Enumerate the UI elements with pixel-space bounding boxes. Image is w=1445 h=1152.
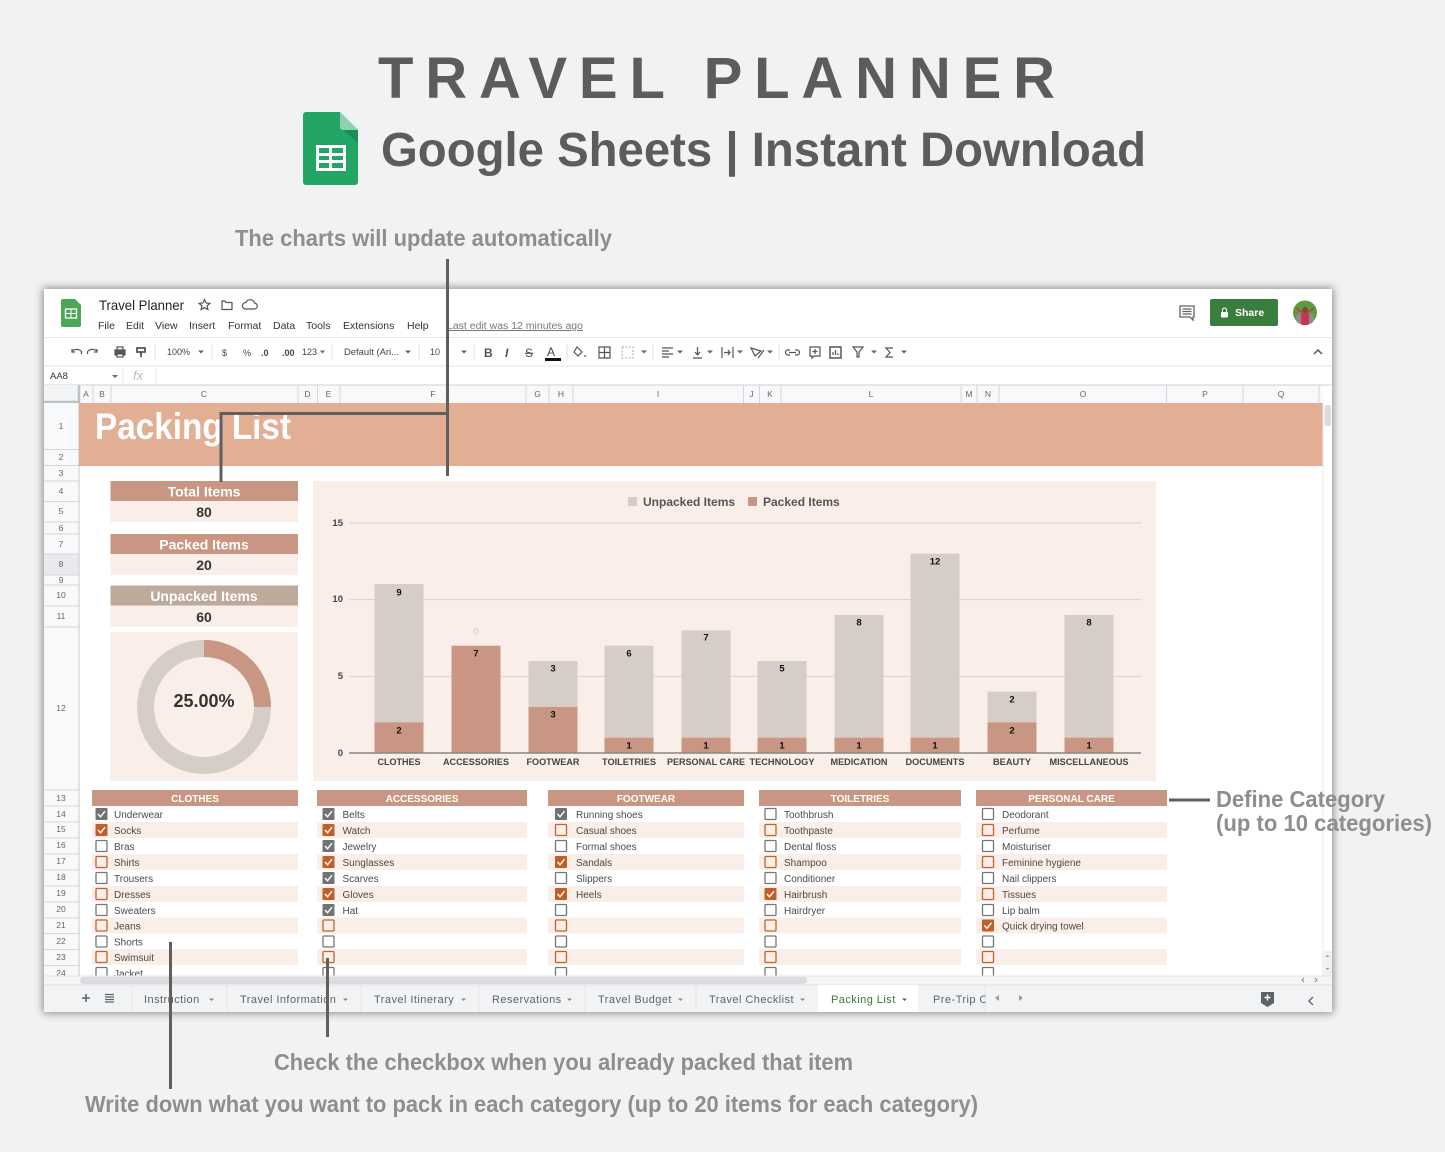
menu bar: Tools bbox=[306, 320, 331, 332]
category labels: TOILETRIES bbox=[602, 757, 656, 767]
panel: column headers: Q bbox=[1278, 389, 1285, 399]
list: accessories: Scarves bbox=[342, 874, 379, 885]
panel: sheet tabs bbox=[44, 985, 1332, 1012]
value labels: 1 bbox=[626, 740, 632, 752]
list: personal care: Moisturiser bbox=[1002, 842, 1052, 853]
chart legend bbox=[628, 495, 840, 509]
donut chart: 25.00% bbox=[173, 691, 235, 711]
toolbar text: 123 bbox=[302, 347, 317, 357]
tab labels: Packing List bbox=[831, 994, 896, 1006]
list: accessories bbox=[317, 790, 527, 978]
panel: column headers: E bbox=[326, 389, 332, 399]
share button bbox=[1210, 299, 1278, 326]
stat: total items bbox=[110, 481, 298, 522]
panel: column headers: C bbox=[201, 389, 207, 399]
list: clothes: Sweaters bbox=[114, 906, 156, 917]
value labels: 6 bbox=[626, 648, 632, 660]
value labels: 3 bbox=[550, 710, 556, 720]
bars bbox=[374, 554, 1114, 753]
value labels: 1 bbox=[932, 740, 938, 752]
panel: row headers: 2 bbox=[59, 452, 64, 462]
list: clothes: Trousers bbox=[114, 874, 153, 885]
chart axis: 15 bbox=[332, 518, 344, 529]
list: accessories: Belts bbox=[342, 810, 365, 821]
panel: row headers: 9 bbox=[59, 575, 64, 585]
stat: packed items bbox=[110, 534, 298, 575]
panel: column headers: J bbox=[749, 389, 754, 399]
list: clothes: Swimsuit bbox=[114, 953, 154, 964]
list: accessories: Watch bbox=[342, 826, 370, 837]
list: clothes: Jacket bbox=[114, 969, 143, 980]
panel: row headers: 23 bbox=[56, 952, 66, 962]
panel: row headers: 4 bbox=[59, 486, 64, 496]
menu bar: View bbox=[155, 320, 178, 332]
list: clothes: Dresses bbox=[114, 890, 151, 901]
tab labels: Pre-Trip C bbox=[933, 994, 988, 1006]
list: clothes: Underwear bbox=[114, 810, 164, 821]
banner: Packing List: Packing List bbox=[95, 406, 291, 447]
tab labels: Reservations bbox=[492, 994, 562, 1006]
panel: column headers: O bbox=[1080, 389, 1087, 399]
value labels: 8 bbox=[856, 618, 862, 628]
panel: column headers: M bbox=[965, 389, 973, 399]
list: toiletries bbox=[759, 790, 961, 978]
list: personal care bbox=[976, 790, 1167, 978]
value labels: 12 bbox=[930, 556, 940, 568]
callout: write items: Write down what you want to pack in each category (up to 20 items for each category) bbox=[85, 1091, 978, 1117]
panel: row headers: 13 bbox=[56, 793, 66, 803]
list: accessories: Hat bbox=[342, 906, 358, 917]
category labels: CLOTHES bbox=[378, 757, 420, 767]
list: footwear bbox=[548, 790, 744, 978]
list: clothes: Socks bbox=[114, 826, 141, 837]
list: clothes: Bras bbox=[114, 842, 135, 853]
callout: checkbox: Check the checkbox when you already packed that item bbox=[274, 1049, 853, 1075]
tab labels: Instruction bbox=[144, 994, 200, 1006]
chart legend: Unpacked Items bbox=[643, 495, 735, 509]
toolbar text: .0 bbox=[261, 348, 269, 358]
panel: row headers: 16 bbox=[56, 840, 66, 850]
list: toiletries: Hairbrush bbox=[784, 890, 827, 901]
value labels: 7 bbox=[473, 648, 479, 660]
value labels: 8 bbox=[1086, 618, 1092, 628]
toolbar text: 10 bbox=[430, 347, 440, 357]
menu bar: Edit bbox=[126, 320, 144, 332]
panel: row headers: 14 bbox=[56, 809, 66, 819]
panel: row headers: 3 bbox=[59, 468, 64, 478]
panel: row headers: 11 bbox=[57, 611, 66, 621]
list: accessories: Jewelry bbox=[342, 842, 376, 853]
list: personal care: Feminine hygiene bbox=[1002, 858, 1081, 869]
stat: total items: Total Items bbox=[168, 484, 241, 500]
menu bar: Insert bbox=[189, 320, 215, 332]
list: accessories: Sunglasses bbox=[342, 858, 394, 869]
panel: row headers: 1 bbox=[59, 421, 64, 431]
list: clothes: CLOTHES bbox=[171, 794, 219, 805]
list: footwear: Slippers bbox=[576, 874, 612, 885]
panel: row headers: 12 bbox=[56, 703, 66, 713]
toolbar text bbox=[167, 345, 907, 361]
list: accessories: ACCESSORIES bbox=[386, 794, 459, 805]
panel: row headers: 21 bbox=[56, 920, 66, 930]
toolbar text: B bbox=[484, 346, 493, 360]
panel: column headers: L bbox=[869, 389, 874, 399]
value labels: 2 bbox=[396, 726, 402, 736]
panel: row headers: 22 bbox=[56, 936, 66, 946]
callout: define category: (up to 10 categories) bbox=[1216, 810, 1432, 836]
category labels: TECHNOLOGY bbox=[750, 757, 814, 767]
menu bar: Help bbox=[407, 320, 429, 332]
tab labels: Travel Information bbox=[240, 994, 336, 1006]
panel: row headers: 6 bbox=[59, 523, 64, 533]
value labels: 1 bbox=[1086, 740, 1092, 752]
panel: row headers: 5 bbox=[59, 506, 64, 516]
panel: row headers: 8 bbox=[59, 559, 64, 569]
list: personal care: Perfume bbox=[1002, 826, 1040, 837]
stat: packed items: 20 bbox=[196, 557, 212, 573]
list: footwear: Heels bbox=[576, 890, 602, 901]
panel: row headers: 18 bbox=[56, 872, 66, 882]
list: personal care: Quick drying towel bbox=[1002, 922, 1084, 932]
title: TRAVEL PLANNER bbox=[378, 46, 1055, 111]
list: personal care: Lip balm bbox=[1002, 906, 1040, 917]
icon: Google Sheets logo bbox=[303, 112, 358, 185]
chart axis bbox=[332, 518, 1141, 759]
category labels: DOCUMENTS bbox=[906, 757, 964, 767]
value labels: 1 bbox=[779, 740, 785, 752]
panel: formula bar: fx bbox=[133, 368, 144, 383]
avatar bbox=[1293, 300, 1317, 325]
list: personal care: Deodorant bbox=[1002, 810, 1049, 821]
callout line: checkbox bbox=[326, 958, 329, 1037]
list: clothes: Jeans bbox=[114, 922, 141, 932]
value labels: 9 bbox=[396, 588, 402, 598]
icon: tab arrows bbox=[995, 995, 1023, 1001]
list: toiletries: Hairdryer bbox=[784, 906, 826, 917]
stat: packed items: Packed Items bbox=[159, 536, 249, 552]
list: footwear: Casual shoes bbox=[576, 826, 637, 837]
menu bar: Data bbox=[273, 320, 295, 332]
banner: Packing List bbox=[79, 403, 1323, 466]
value labels: 2 bbox=[1009, 726, 1015, 736]
value labels: 5 bbox=[779, 664, 785, 674]
menu bar bbox=[98, 320, 583, 332]
panel: formula bar: AA8 bbox=[50, 371, 68, 382]
callout: charts update: The charts will update automatically bbox=[235, 225, 612, 251]
panel: row headers: 19 bbox=[56, 888, 66, 898]
panel: column headers: K bbox=[767, 389, 773, 399]
chart axis: 5 bbox=[338, 671, 344, 682]
list: footwear: FOOTWEAR bbox=[617, 794, 676, 805]
value labels: 0 bbox=[473, 626, 479, 638]
callout line: define category bbox=[1169, 798, 1210, 802]
list: toiletries: Dental floss bbox=[784, 842, 836, 853]
list: toiletries: TOILETRIES bbox=[831, 794, 890, 805]
list: toiletries: Shampoo bbox=[784, 858, 827, 869]
callout: define category: Define Category bbox=[1216, 786, 1385, 812]
list: footwear: Sandals bbox=[576, 858, 612, 869]
list: toiletries: Toothbrush bbox=[784, 810, 833, 821]
toolbar text: I bbox=[505, 346, 509, 360]
category labels bbox=[378, 757, 1128, 767]
toolbar text: Default (Ari... bbox=[344, 347, 399, 357]
value labels bbox=[396, 556, 1092, 752]
list: footwear: Running shoes bbox=[576, 810, 643, 821]
panel: column headers: N bbox=[985, 389, 991, 399]
menu bar: Format bbox=[228, 320, 261, 332]
tab labels: Travel Itinerary bbox=[374, 994, 454, 1006]
tab labels: Travel Budget bbox=[598, 994, 672, 1006]
tab labels bbox=[144, 994, 988, 1006]
list: toiletries: Conditioner bbox=[784, 874, 836, 885]
value labels: 1 bbox=[703, 740, 709, 752]
icon: comments bbox=[1180, 306, 1194, 320]
panel: formula bar bbox=[44, 367, 1332, 385]
callout line: item list bbox=[169, 942, 172, 1089]
tab labels: Travel Checklist bbox=[709, 994, 794, 1006]
list: personal care: Tissues bbox=[1002, 890, 1036, 901]
toolbar text: S bbox=[525, 346, 533, 360]
list: footwear: Formal shoes bbox=[576, 842, 637, 853]
icon: all sheets bbox=[105, 994, 114, 1002]
panel: column headers: I bbox=[657, 389, 659, 399]
toolbar icons right bbox=[574, 347, 1322, 358]
panel: row headers: 20 bbox=[56, 904, 66, 914]
value labels: 7 bbox=[703, 632, 709, 644]
toolbar icons left bbox=[72, 347, 145, 357]
toolbar text: 100% bbox=[167, 347, 190, 357]
donut chart bbox=[110, 632, 298, 781]
subtitle: Google Sheets | Instant Download bbox=[381, 124, 1146, 177]
value labels: 2 bbox=[1009, 694, 1015, 706]
document name: Travel Planner bbox=[99, 297, 184, 313]
list: personal care: PERSONAL CARE bbox=[1028, 794, 1115, 805]
panel: column headers: B bbox=[99, 389, 105, 399]
panel: row headers: 17 bbox=[56, 856, 66, 866]
icon: sheets small bbox=[61, 299, 81, 327]
stat: total items: 80 bbox=[196, 504, 212, 520]
panel: toolbar bbox=[44, 338, 1332, 366]
stat: unpacked items: Unpacked Items bbox=[150, 588, 258, 604]
icon: explore bbox=[1261, 992, 1274, 1007]
chart axis: 10 bbox=[332, 594, 343, 605]
stat: unpacked items bbox=[110, 586, 298, 627]
list: clothes: Shorts bbox=[114, 938, 143, 948]
chart legend: Packed Items bbox=[763, 495, 840, 509]
toolbar text: .00 bbox=[282, 348, 295, 358]
panel: row headers: 10 bbox=[56, 590, 66, 600]
bar chart bbox=[313, 481, 1156, 781]
category labels: FOOTWEAR bbox=[526, 757, 580, 767]
menu bar: Extensions bbox=[343, 320, 394, 332]
panel: row headers: 24 bbox=[56, 968, 66, 978]
panel: row headers: 15 bbox=[56, 824, 66, 834]
category labels: MEDICATION bbox=[830, 757, 888, 767]
stat: unpacked items: 60 bbox=[196, 609, 212, 625]
icons: star folder cloud bbox=[199, 300, 257, 310]
value labels: 1 bbox=[856, 740, 862, 752]
panel: column headers: H bbox=[558, 389, 564, 399]
share button: Share bbox=[1235, 307, 1264, 319]
menu bar: File bbox=[98, 320, 115, 332]
category labels: PERSONAL CARE bbox=[667, 757, 745, 767]
panel: column headers bbox=[44, 385, 1332, 403]
icon: add sheet bbox=[82, 994, 90, 1002]
panel: column headers: F bbox=[430, 389, 436, 399]
icon: collapse bbox=[1309, 997, 1313, 1005]
list: clothes bbox=[92, 790, 298, 980]
category labels: MISCELLANEOUS bbox=[1050, 757, 1128, 767]
toolbar text: A bbox=[547, 345, 555, 359]
category labels: ACCESSORIES bbox=[443, 757, 509, 767]
toolbar text: $ bbox=[222, 348, 227, 358]
panel: spreadsheet header bar bbox=[44, 289, 1332, 338]
toolbar text: % bbox=[243, 348, 251, 358]
scrollbars bbox=[44, 403, 1332, 985]
value labels: 3 bbox=[550, 664, 556, 674]
list: toiletries: Toothpaste bbox=[784, 826, 833, 837]
panel: row headers: 7 bbox=[59, 539, 64, 549]
panel: column headers: P bbox=[1202, 389, 1208, 399]
chart axis: 0 bbox=[338, 748, 343, 759]
list: personal care: Nail clippers bbox=[1002, 874, 1056, 885]
callout line: charts bbox=[221, 259, 448, 482]
list: clothes: Shirts bbox=[114, 858, 140, 869]
list: accessories: Gloves bbox=[342, 890, 374, 901]
category labels: BEAUTY bbox=[993, 757, 1031, 767]
panel: column headers: D bbox=[304, 389, 311, 399]
panel: column headers: A bbox=[83, 389, 89, 399]
callout: define category bbox=[1216, 786, 1432, 836]
panel: row headers bbox=[44, 403, 79, 978]
menu bar: Last edit was 12 minutes ago bbox=[447, 321, 583, 332]
panel: column headers: G bbox=[534, 389, 541, 399]
